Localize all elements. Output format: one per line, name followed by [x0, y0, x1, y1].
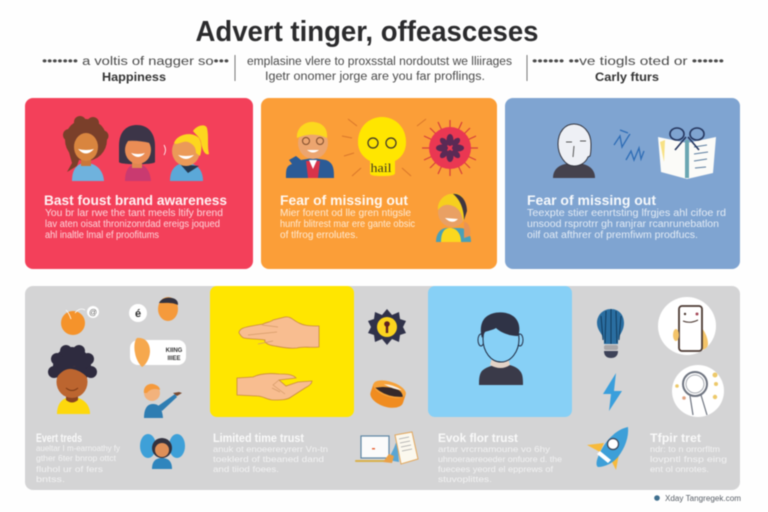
- text block: evert treds: fluhol ur of fers: [36, 464, 103, 474]
- icon: upper hand: [239, 317, 319, 348]
- icon: laughing person: [436, 193, 471, 242]
- heading: Fear of missing out: [527, 193, 657, 208]
- icon: phone in white circle: [658, 297, 716, 355]
- icon: red virus burst: [422, 120, 478, 176]
- body text: You br lar rwe the tant meels ltify brend: [45, 208, 223, 219]
- panel: brand awareness: [25, 98, 253, 269]
- text block: evert treds: aueltar I m-earnoathy fy: [36, 443, 121, 453]
- header column: carly furs: [532, 56, 724, 84]
- footer credit: Xday Tangregek.com: [665, 494, 741, 503]
- text block: limited time trust: toeklerd of tbeaned dand: [213, 454, 324, 464]
- panel: fear of missing out, orange: [261, 98, 497, 269]
- card: light blue avatar: [428, 286, 572, 417]
- icon: orange disc: [368, 377, 408, 412]
- icon: man in suit: [286, 122, 334, 178]
- heading: Bast foust brand awareness: [44, 193, 227, 208]
- icon: speech card with person: IIIEE: [167, 356, 181, 362]
- icon: speech card with person: KIING: [166, 348, 183, 354]
- header column: centre text: [247, 56, 512, 83]
- icon: speech card with person: [130, 338, 186, 367]
- panel: fear of missing out, blue: [505, 98, 740, 269]
- icon: bubble with orange head: é: [135, 308, 141, 320]
- header column: happiness: ••••••• a voltis of nagger so•••: [42, 56, 229, 68]
- header column: happiness: [42, 56, 229, 84]
- text block: tfpir tret: lovpntl fnsp eing: [650, 454, 727, 464]
- icon: magnifier in white circle: [672, 365, 724, 417]
- text block: evert treds: [36, 433, 121, 484]
- body text: unsood rsprotrr gh ranjrar rcanrunebatlon: [527, 219, 719, 230]
- text block: tfpir tret: Tfpir tret: [650, 433, 701, 445]
- text block: evert treds: gther 6ter bnrop ottct: [36, 453, 117, 463]
- text block: limited time trust: anuk ot enoeereryrerr Vn-tn: [213, 444, 328, 454]
- header column: centre text: Igetr onomer jorge are you far proflings.: [265, 71, 485, 83]
- text block: evok flor trust: Evok flor trust: [438, 433, 518, 445]
- panel: lower grey band: [25, 286, 740, 490]
- body text: [527, 208, 726, 241]
- text block: limited time trust: [213, 433, 328, 474]
- icon: lightning bolt: [603, 373, 622, 411]
- text block: tfpir tret: ent ol onrotes.: [650, 464, 709, 474]
- header column: happiness: Happiness: [102, 70, 166, 84]
- icon: pointing man: [144, 384, 182, 418]
- body text: [45, 208, 223, 241]
- icon: bubble with orange head: [129, 297, 178, 322]
- icon: dark gear with keyhole: [368, 309, 406, 345]
- text block: limited time trust: and tiiod foees.: [213, 464, 279, 474]
- icon: lower hand: [237, 374, 312, 400]
- icon: bald man: [553, 124, 595, 178]
- body text: lav aten oisat thronizonrdad ereigs joqued: [45, 219, 220, 230]
- icon: book with bow: [658, 128, 716, 179]
- body text: ahl inaltle lmal ef proofitums: [45, 230, 159, 241]
- header column: centre text: emplasine vlere to proxsstal nordoutst we lliirages: [247, 56, 512, 68]
- text block: evok flor trust: [438, 433, 562, 484]
- body text: of tlfrog errolutes.: [280, 230, 358, 241]
- body text: hunfr blitrest mar ere gante obsic: [280, 219, 415, 230]
- text block: tfpir tret: [650, 433, 727, 474]
- card: yellow hands: [210, 286, 354, 417]
- text block: evert treds: Evert treds: [36, 433, 82, 445]
- icon: woman with curly brown hair: [63, 116, 108, 181]
- text block: limited time trust: Limited time trust: [213, 433, 304, 445]
- text block: evok flor trust: stuvoplittes.: [438, 474, 492, 484]
- icon: woman with dark bob: [119, 125, 155, 181]
- icon: yellow skull with rays: hail: [370, 160, 392, 175]
- icon: orange fruit with @ bubble: [61, 306, 99, 335]
- title: Advert tinger, offeasceses: [196, 16, 538, 48]
- icon: person with blue headphones: [140, 434, 185, 469]
- icon: blue light bulb: [597, 309, 624, 358]
- body text: Teexpte stier eenrtsting lfrgjes ahl cifoe rd: [527, 208, 726, 219]
- icon: yellow skull with rays: [342, 117, 426, 176]
- body text: oilf oat afthrer of premfiwm prodfucs.: [527, 230, 698, 241]
- icon: curly-haired boy: [48, 345, 97, 414]
- body text: Mier forent od lle gren ntigsle: [280, 208, 411, 219]
- icon: laptop and notes: [355, 432, 418, 464]
- text block: evok flor trust: fuecees yeord el epprews of: [438, 464, 554, 474]
- heading: Fear of missing out: [280, 193, 409, 208]
- icon: orange fruit with @ bubble: @: [89, 308, 97, 317]
- icon: faceless person: [478, 312, 523, 385]
- icon: rocket: [587, 427, 628, 470]
- icon: woman with blond ponytail: [164, 125, 209, 181]
- body text: [280, 208, 415, 241]
- icon: wavy scribbles: [614, 130, 644, 160]
- text block: evert treds: bntss.: [36, 474, 65, 484]
- header column: carly furs: Carly fturs: [595, 70, 659, 84]
- text block: evok flor trust: uhnoeraereoeder onfuore d. the: [438, 454, 562, 464]
- header column: carly furs: •••••• ••ve tiogls oted or ••••••: [532, 56, 724, 68]
- text block: evok flor trust: artar vrcrnamoune vo 6hy: [438, 444, 551, 454]
- text block: tfpir tret: ndr: to n orrorfltm: [650, 444, 720, 454]
